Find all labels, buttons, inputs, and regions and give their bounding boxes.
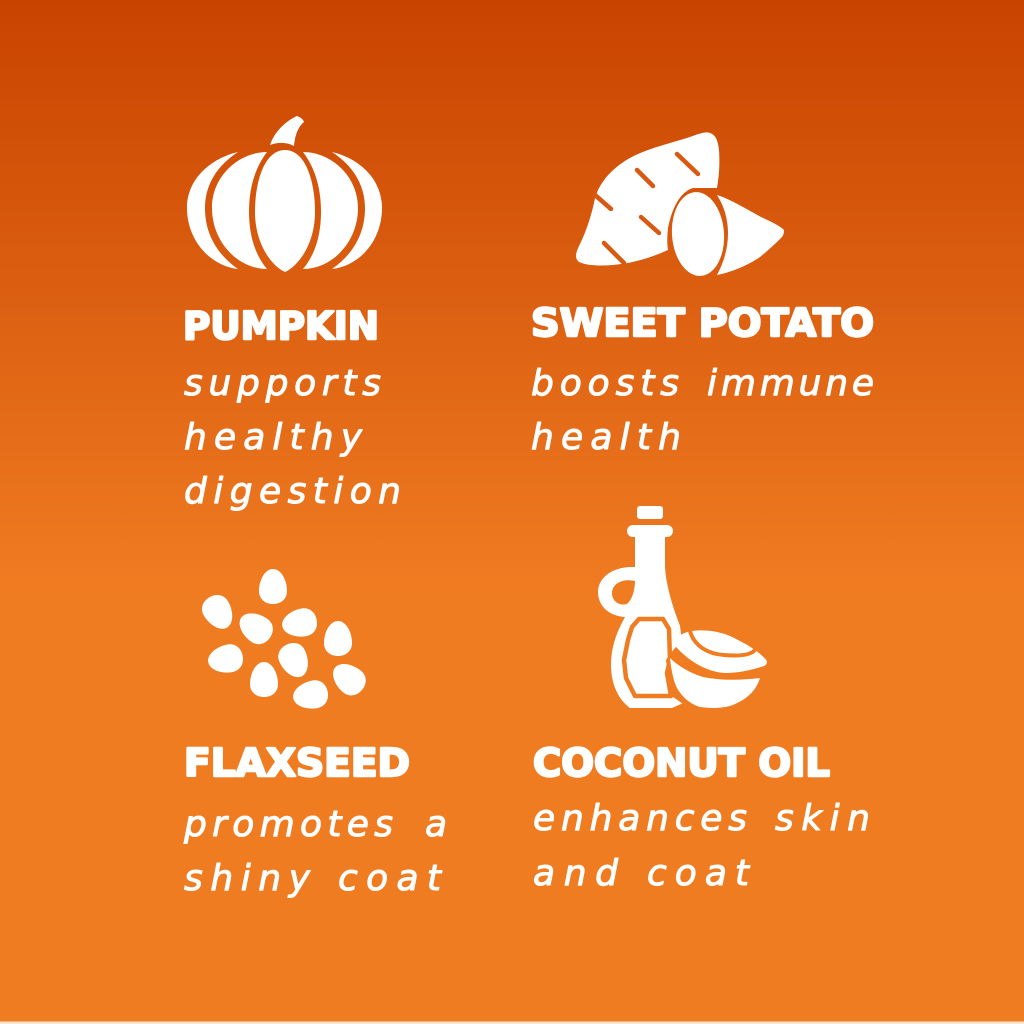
text: sweet potato benefit [531,363,874,458]
text: flaxseed benefit: a [425,804,447,845]
icon: pumpkin [187,116,382,272]
text: coconut oil benefit: enhances [533,798,747,839]
text: flaxseed benefit: coat [338,858,443,899]
panel: sweet potato [531,132,874,458]
icon: flaxseeds [197,569,371,712]
panel: pumpkin [183,116,401,512]
text: coconut oil benefit: skin [775,798,870,839]
panel: coconut oil [533,506,870,894]
heading: sweet potato: SWEET POTATO [531,301,874,345]
text: pumpkin benefit [184,363,401,512]
icon: sweet potato [576,132,784,278]
heading: flaxseed: FLAXSEED [184,741,410,785]
text: pumpkin benefit: healthy [184,417,363,458]
text: flaxseed benefit: promotes [183,804,393,845]
text: sweet potato benefit: boosts [531,363,679,404]
text: coconut oil benefit: and [533,853,619,894]
text: pumpkin benefit: supports [184,363,381,404]
panel: flaxseed [183,569,447,899]
text: flaxseed benefit [183,804,447,899]
text: sweet potato benefit: health [531,417,681,458]
text: coconut oil benefit: coat [647,853,751,894]
heading: coconut oil: COCONUT OIL [533,741,830,785]
text: pumpkin benefit: digestion [184,471,401,512]
text: coconut oil benefit [533,798,870,894]
icon: oil bottle and coconut [598,506,770,713]
heading: pumpkin: PUMPKIN [183,304,379,348]
text: sweet potato benefit: immune [707,363,874,404]
text: flaxseed benefit: shiny [184,858,311,899]
